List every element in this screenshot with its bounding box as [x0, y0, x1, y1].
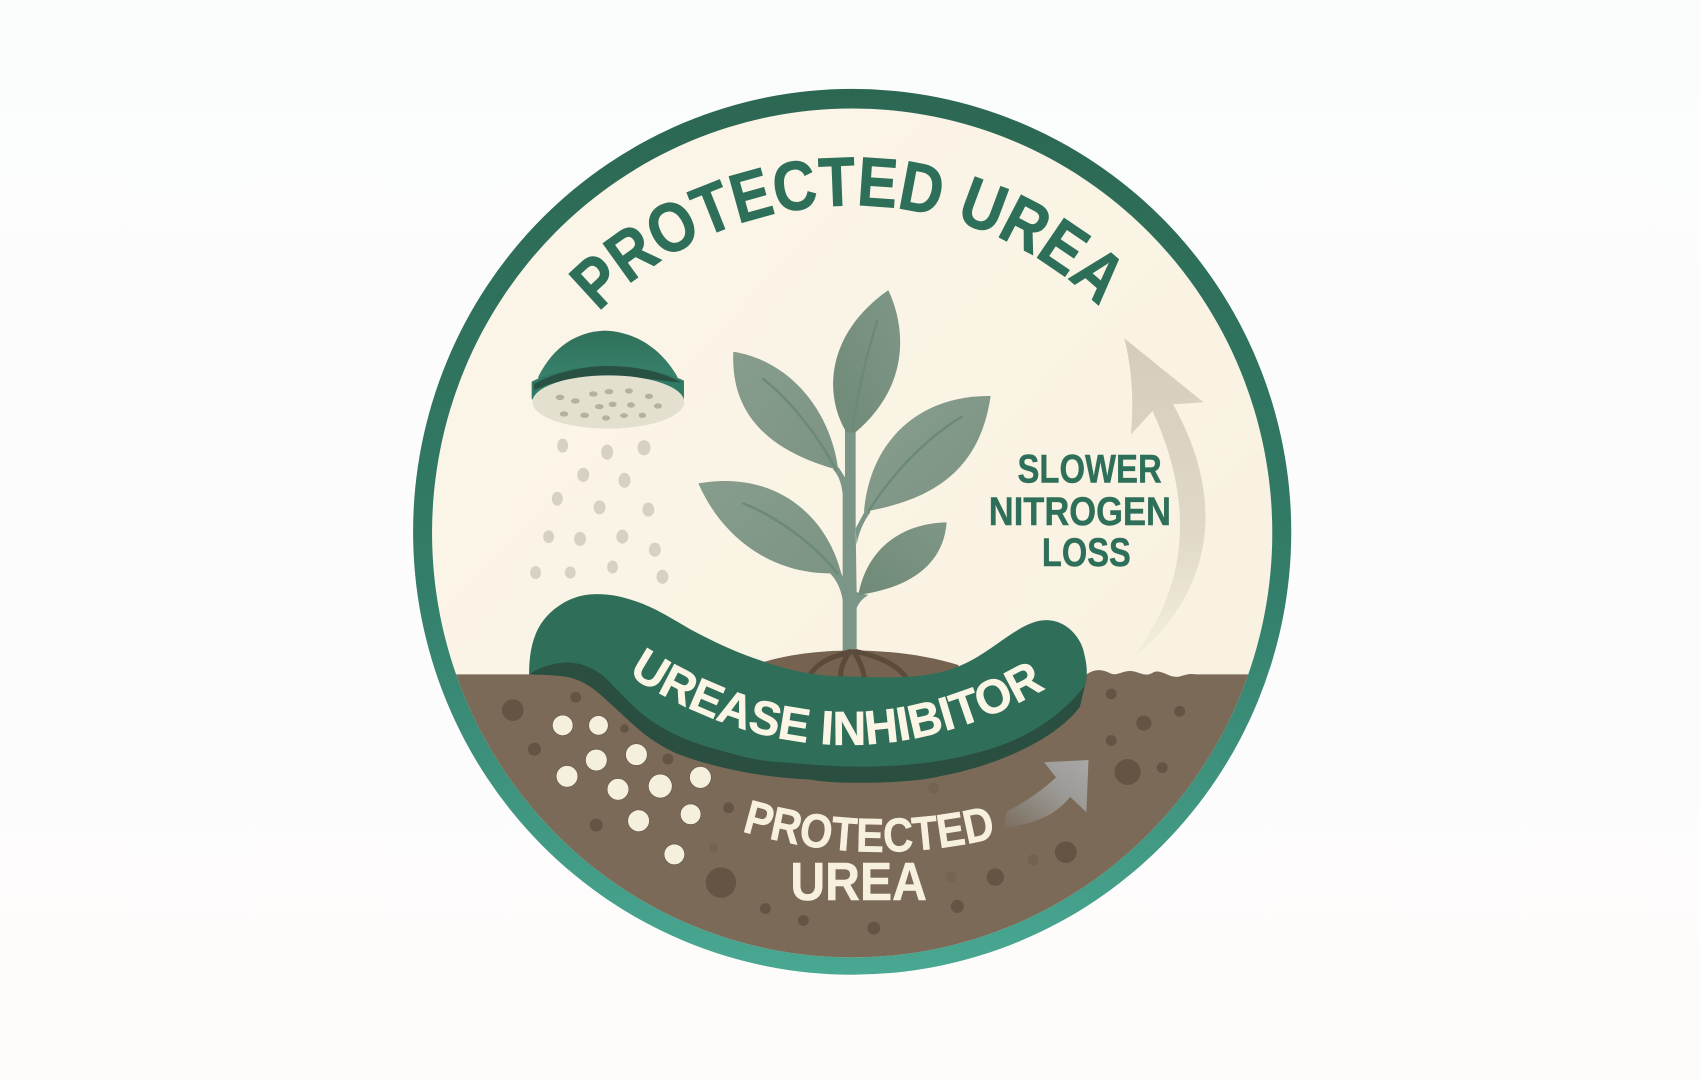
label: slower nitrogen loss	[989, 447, 1171, 575]
leaf: lower left	[698, 481, 842, 575]
band label: urease inhibitor: UREASE INHIBITOR	[634, 648, 1046, 746]
arrow: gray soil arrow	[1004, 760, 1089, 828]
soil mound with roots	[762, 650, 958, 693]
label: slower nitrogen loss: NITROGEN	[989, 490, 1171, 534]
leaf: top	[833, 290, 900, 433]
label: protected urea in soil	[744, 800, 992, 912]
plant	[698, 290, 991, 693]
urease inhibitor band	[529, 594, 1087, 783]
plant stem and branches	[829, 430, 871, 652]
leaf: upper left	[733, 352, 838, 470]
label: protected urea in soil: UREA	[790, 852, 927, 912]
icon: spreader head	[532, 331, 684, 429]
soil ground	[456, 670, 1248, 958]
leaf: upper right	[864, 396, 991, 512]
title: protected urea: PROTECTED UREA	[568, 157, 1119, 310]
soil specks	[502, 688, 1185, 935]
label: slower nitrogen loss: SLOWER	[1018, 447, 1162, 491]
urea pellets	[552, 715, 711, 865]
protected urea badge infographic	[413, 88, 1292, 975]
leaf veins	[743, 321, 962, 573]
badge cream interior	[432, 108, 1272, 957]
label: protected urea in soil: PROTECTED	[744, 800, 992, 852]
label: slower nitrogen loss: LOSS	[1042, 531, 1131, 575]
badge outer ring	[413, 89, 1291, 975]
leaf: lower right	[858, 522, 947, 595]
falling urea granules	[530, 439, 668, 584]
upward arrow: nitrogen loss	[1124, 338, 1205, 664]
